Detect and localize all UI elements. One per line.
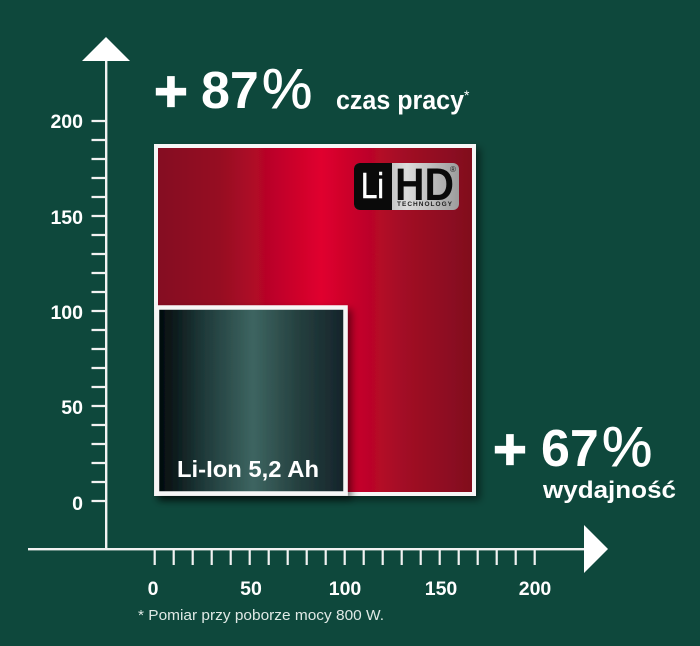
x axis arrowhead [584,525,608,573]
callout: +67% efficiency: 67 [541,420,599,478]
y axis labels: 0 [72,493,83,515]
LiHD logo: ® [450,165,456,174]
LiHD logo: Li [361,165,384,206]
heading: +87% working time: czas pracy [336,87,465,115]
x axis [28,525,608,573]
y axis labels [50,111,83,515]
heading: +87% working time: * [464,87,470,103]
LiHD logo: TECHNOLOGY [397,201,453,208]
heading: +87% working time: % [262,57,312,120]
heading: +87% working time: + [154,59,188,124]
heading: +87% working time: 87 [201,62,259,120]
callout: +67% efficiency [493,415,676,504]
y axis labels: 50 [61,397,83,419]
Li-Ion label: Li-Ion 5,2 Ah [177,456,319,482]
callout: +67% efficiency: % [602,415,652,478]
x axis labels: 200 [519,578,551,600]
footnote: * Pomiar przy poborze mocy 800 W. [138,607,384,624]
x axis labels: 0 [148,578,159,600]
panel: LiHD red box [156,146,474,494]
x axis labels [148,578,551,600]
x axis labels: 50 [240,578,262,600]
y axis [82,37,130,550]
x axis labels: 150 [425,578,457,600]
LiHD logo: HD [395,159,454,210]
y axis labels: 200 [50,111,83,133]
y axis arrowhead [82,37,130,61]
callout: +67% efficiency: wydajność [542,477,676,504]
heading: +87% working time [154,57,470,124]
callout: +67% efficiency: + [493,417,527,482]
y axis labels: 150 [50,207,83,229]
panel: Li-Ion box [157,308,346,494]
LiHD logo [354,159,459,210]
y axis labels: 100 [50,302,83,324]
x axis labels: 100 [329,578,361,600]
